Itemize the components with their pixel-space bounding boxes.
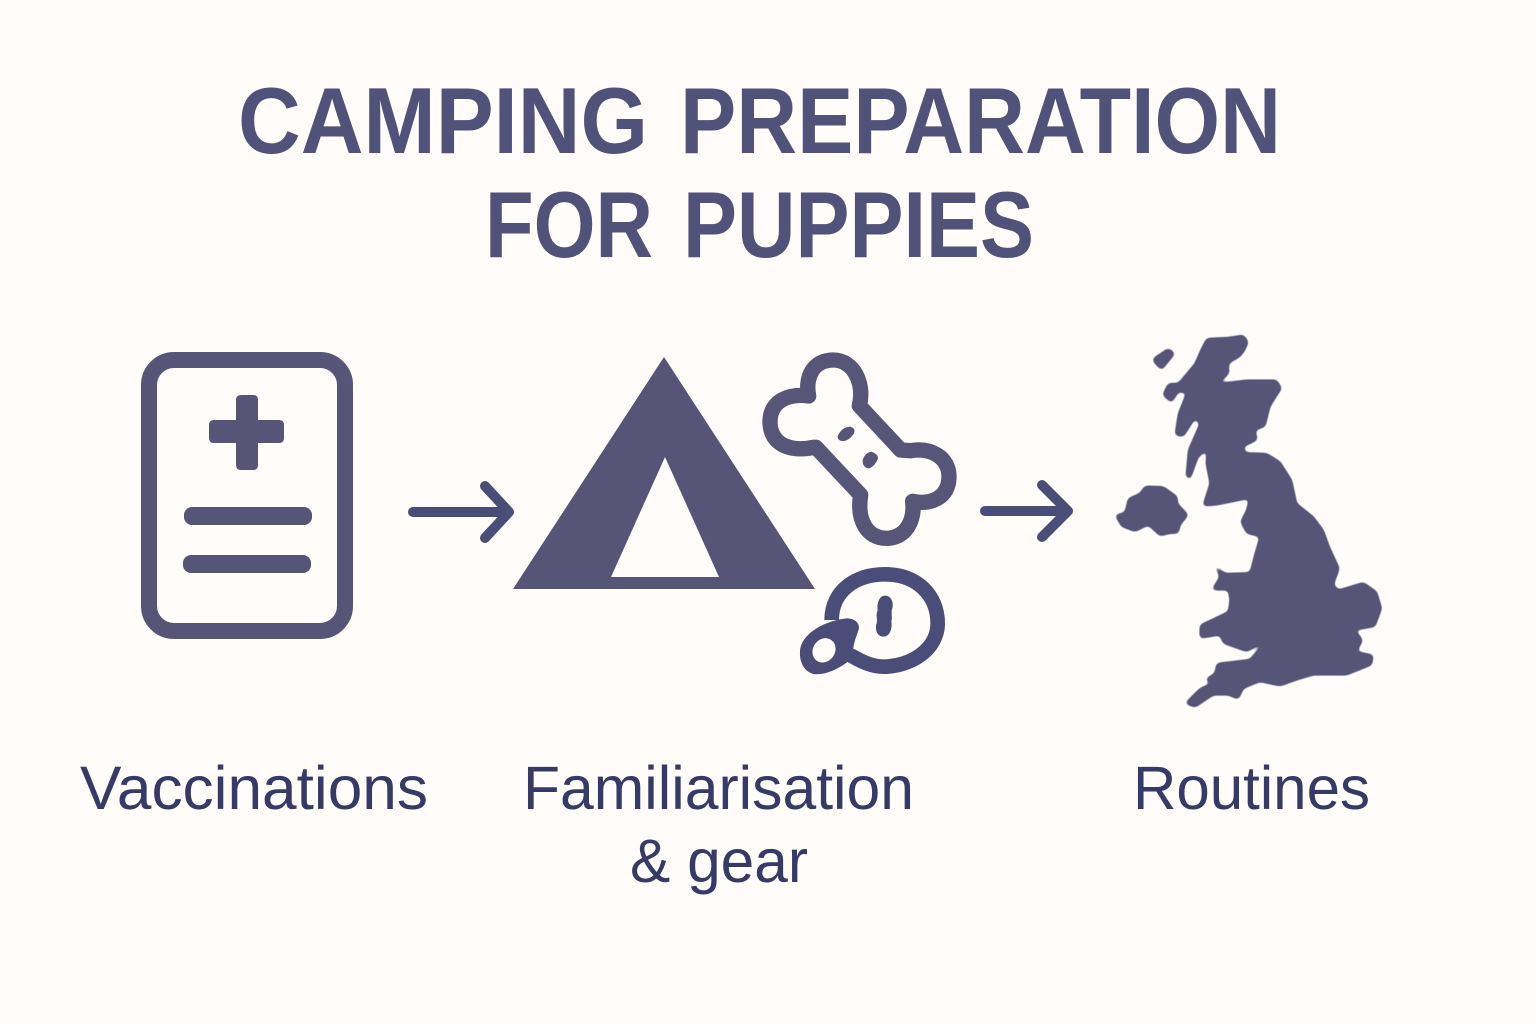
title: FOR bbox=[485, 172, 653, 277]
label: familiarisation and gear bbox=[523, 754, 914, 895]
title: PREPARATION bbox=[680, 68, 1281, 173]
icon: dog bone bbox=[770, 360, 949, 538]
icon: map of the UK bbox=[1115, 335, 1382, 707]
title: PUPPIES bbox=[683, 172, 1034, 277]
label: routines: Routines bbox=[1133, 754, 1370, 822]
label: familiarisation and gear: & gear bbox=[630, 827, 808, 895]
label: familiarisation and gear: Familiarisation bbox=[523, 754, 914, 822]
icon: vaccination record bbox=[149, 360, 345, 631]
icon: medical cross bbox=[209, 395, 284, 470]
label: vaccinations: Vaccinations bbox=[80, 754, 428, 822]
title bbox=[238, 68, 1281, 277]
icon: tent bbox=[513, 357, 815, 589]
arrow: familiarisation to routines bbox=[985, 485, 1068, 537]
title: CAMPING bbox=[238, 68, 648, 173]
arrow: vaccinations to familiarisation bbox=[413, 486, 509, 538]
icon: pet tag bbox=[800, 574, 938, 674]
